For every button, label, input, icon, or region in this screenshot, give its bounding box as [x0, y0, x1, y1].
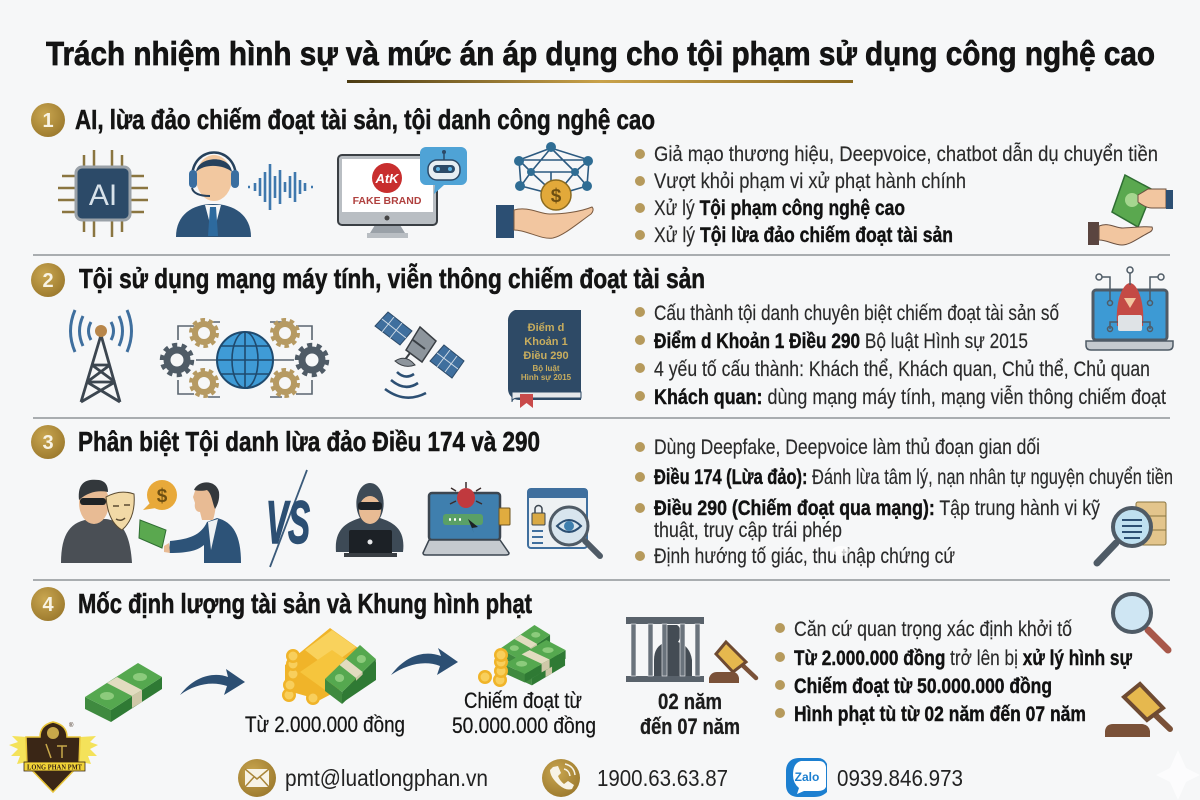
panel: section 4: [31, 587, 1170, 739]
label: prison term: [640, 689, 740, 739]
list 1: Xử lý Tội phạm công nghệ cao: [654, 197, 905, 220]
label: 50 million: 50.000.000 đồng: [452, 713, 596, 738]
contact: phone: 1900.63.63.87: [597, 765, 728, 791]
badge 1: [31, 103, 65, 137]
icon: hooded hacker at laptop: [336, 483, 403, 557]
icon: masked fraudster with victim: [61, 480, 241, 563]
list 4: Hình phạt tù từ 02 năm đến 07 năm: [794, 703, 1086, 726]
icon: call agent with voice wave: [176, 152, 313, 237]
heading 2: Tội sử dụng mạng máy tính, viễn thông chiếm đoạt tài sản: [79, 263, 705, 294]
label: 50 million: Chiếm đoạt từ: [464, 688, 582, 713]
icon: fake brand monitor with chatbot: [338, 147, 467, 238]
heading 1: AI, lừa đảo chiếm đoạt tài sản, tội danh công nghệ cao: [75, 104, 655, 135]
icon: globe with gears: [162, 320, 327, 397]
icon: laptop with bug and login: [423, 482, 510, 555]
icon: law book: Bộ luật: [532, 364, 560, 373]
panel: section 2: [31, 263, 1173, 409]
icon: law book: Khoản 1: [524, 336, 568, 348]
icon: magnifying glass: [1113, 594, 1168, 650]
label: prison term: 02 năm: [658, 689, 722, 714]
arrow: [180, 669, 245, 695]
icon: gold bars with money: [282, 628, 376, 705]
contact: email: [238, 759, 488, 797]
VS divider: [266, 470, 310, 567]
badge 4: [31, 587, 65, 621]
badge 3: 3: [42, 432, 54, 454]
logo: Long Phan PMT: [9, 722, 98, 792]
list 3: Điều 290 (Chiếm đoạt qua mạng): Tập trung hành vi kỹ: [654, 497, 1100, 520]
icon: hacker laptop: [1086, 267, 1173, 350]
badge 3: [31, 425, 65, 459]
heading 3: Phân biệt Tội danh lừa đảo Điều 174 và 290: [78, 426, 540, 457]
list 3: thuật, truy cập trái phép: [654, 519, 842, 542]
VS divider: VS: [266, 489, 310, 556]
contact: zalo: [786, 758, 963, 797]
contact: phone: [542, 759, 728, 797]
icon: masked fraudster with victim: $: [157, 486, 168, 507]
icon: money stacks with coins: [478, 625, 566, 687]
icon: server and magnifier: [1097, 502, 1166, 563]
icon: money stack: [85, 663, 162, 722]
icon: law book: Điểm d: [528, 322, 564, 334]
list 4: Từ 2.000.000 đồng trở lên bị xử lý hình sự: [794, 647, 1133, 670]
list 1: Vượt khỏi phạm vi xử phạt hành chính: [654, 170, 966, 193]
label: prison term: đến 07 năm: [640, 714, 740, 739]
contact: zalo: 0939.846.973: [837, 765, 963, 791]
icon: browser lock and magnifier: [528, 489, 600, 556]
icon: prison bars: [626, 617, 704, 682]
list 4: Chiếm đoạt từ 50.000.000 đồng: [794, 675, 1052, 698]
list 4: [775, 618, 1133, 726]
icon: AI chip: [58, 150, 148, 237]
icon: satellite: [375, 312, 464, 398]
icon: radio tower: [70, 310, 132, 402]
icon: network and coin over hand: $: [551, 186, 562, 207]
icon: large gavel: [1105, 684, 1170, 737]
panel: section 1: [31, 103, 1173, 247]
list 2: Điểm d Khoản 1 Điều 290 Bộ luật Hình sự 2015: [654, 330, 1028, 353]
list 3: Dùng Deepfake, Deepvoice làm thủ đoạn gian dối: [654, 436, 1040, 459]
badge 2: [31, 263, 65, 297]
icon: money between hands: [1088, 175, 1173, 245]
badge 2: 2: [42, 270, 54, 292]
icon: AI chip: AI: [89, 179, 117, 212]
label: 50 million: [452, 688, 596, 738]
footer contacts: [238, 758, 963, 797]
icon: network and coin over hand: [496, 142, 593, 238]
icon: gavel: [709, 642, 756, 683]
list 2: Cấu thành tội danh chuyên biệt chiếm đoạt tài sản số: [654, 302, 1059, 325]
list 1: [635, 143, 1158, 247]
heading 4: Mốc định lượng tài sản và Khung hình phạt: [78, 588, 532, 619]
icon: law book: [508, 310, 581, 408]
watermark sparkle: [1156, 750, 1200, 800]
panel: section 3: [31, 425, 1173, 568]
badge 4: 4: [42, 594, 54, 616]
icon: fake brand monitor with chatbot: AtK: [374, 171, 400, 186]
logo: Long Phan PMT: ®: [69, 722, 74, 729]
contact: email: pmt@luatlongphan.vn: [285, 765, 488, 791]
list 2: [635, 302, 1166, 409]
arrow: [391, 648, 458, 675]
icon: law book: Hình sự 2015: [521, 373, 572, 382]
list 1: Xử lý Tội lừa đảo chiếm đoạt tài sản: [654, 224, 953, 247]
label: 2 million: Từ 2.000.000 đồng: [245, 712, 405, 737]
list 3: Định hướng tố giác, thu thập chứng cứ: [654, 545, 955, 568]
icon: fake brand monitor with chatbot: FAKE BRAND: [353, 195, 422, 207]
contact: zalo: Zalo: [795, 770, 819, 784]
logo: Long Phan PMT: LONG PHAN PMT: [27, 762, 82, 772]
icon: law book: Điều 290: [523, 350, 569, 362]
list 4: Căn cứ quan trọng xác định khởi tố: [794, 618, 1072, 641]
list 3: [635, 436, 1173, 568]
badge 1: 1: [42, 110, 54, 132]
